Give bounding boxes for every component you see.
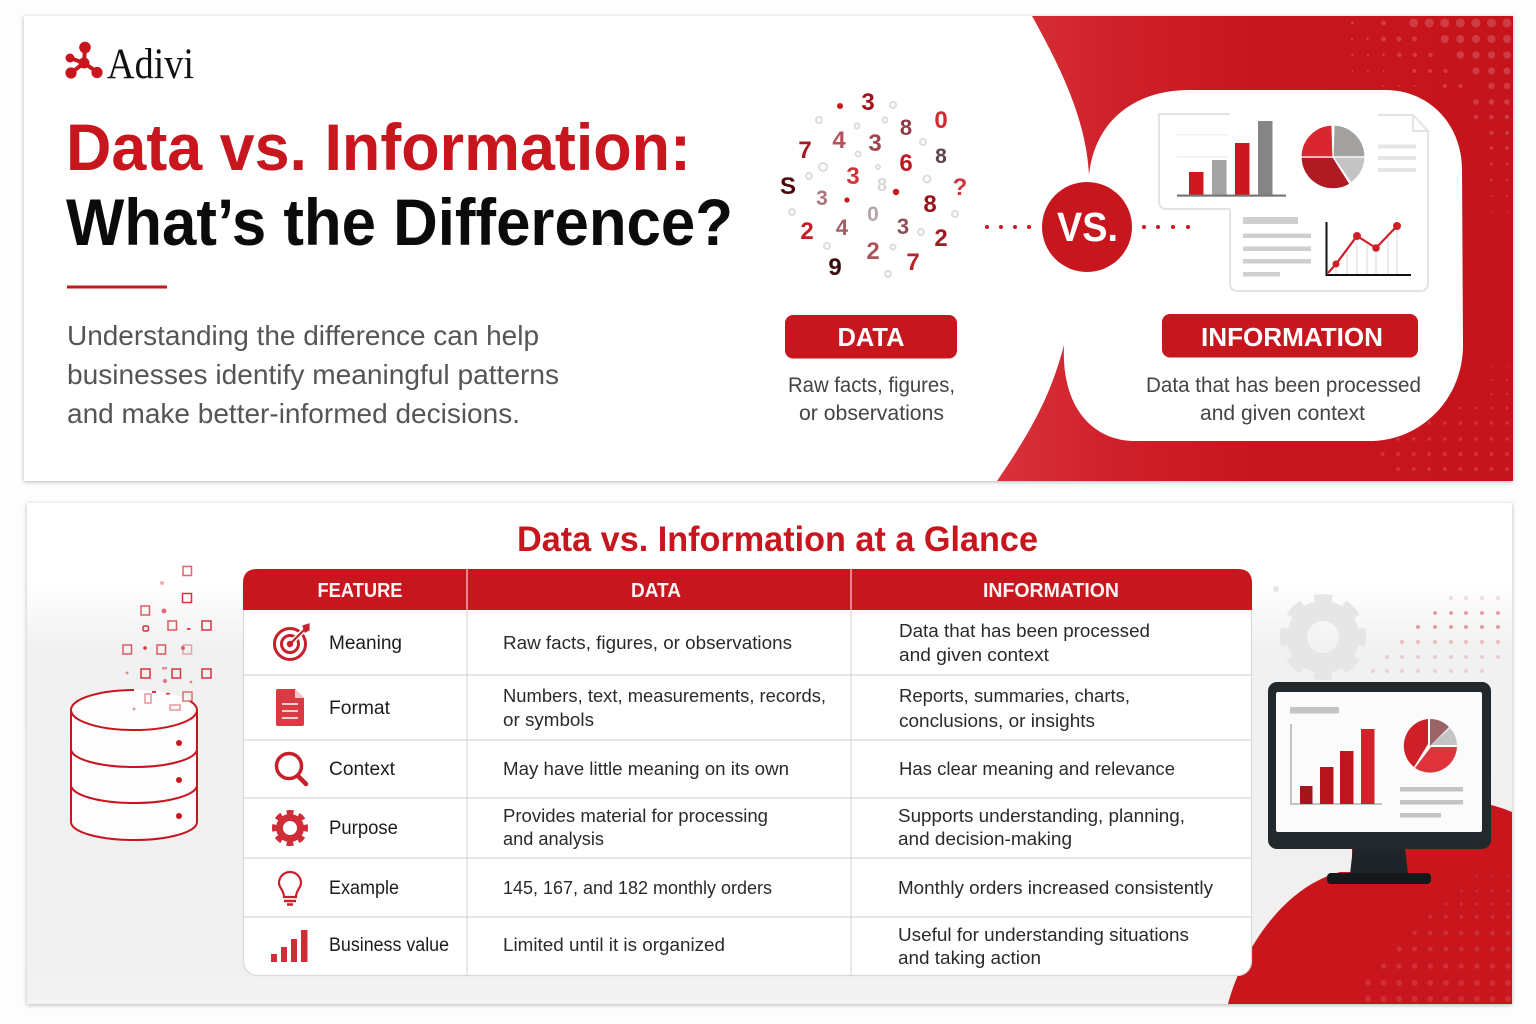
row: Purpose: and decision-making [898,828,1072,849]
logo: Adivi [65,41,194,88]
INFORMATION label button: INFORMATION [1201,322,1383,352]
row: Format: conclusions, or insights [899,710,1095,731]
decorative gear [1273,586,1357,671]
intro paragraph: businesses identify meaningful patterns [67,359,559,390]
illustration: database with data particles [71,566,211,840]
row: Format [276,685,1130,731]
illustration: scattered data numbers: 2 [866,238,880,265]
illustration: scattered data numbers: 0 [934,107,948,134]
illustration: scattered data numbers: 3 [816,187,828,210]
DATA label button: DATA [838,322,905,352]
red background shape [997,16,1513,481]
information description [1146,374,1421,425]
intro paragraph [67,320,559,429]
report card outline [1159,114,1428,291]
illustration: scattered data numbers: 7 [798,137,812,164]
VS badge: VS. [1057,204,1118,250]
data description: Raw facts, figures, [788,374,955,397]
row: Business value: Business value [329,935,449,956]
illustration: scattered data numbers: 4 [832,127,846,154]
row: Context: Has clear meaning and relevance [899,758,1175,779]
monitor screen [1276,692,1482,832]
row: Meaning: Data that has been processed [899,620,1150,641]
data particles [123,566,211,710]
illustration: scattered data numbers: 8 [900,115,912,140]
illustration: scattered data numbers: 9 [828,254,842,281]
INFORMATION label button [1162,314,1418,358]
illustration: scattered data numbers: 8 [935,145,947,168]
row: Meaning: and given context [899,644,1049,665]
bar chart [1177,121,1286,197]
table header row: INFORMATION [983,580,1119,602]
row: Context [276,754,1175,784]
row: Business value: Useful for understanding situations [898,924,1189,945]
report text lines [1243,217,1311,276]
row: Purpose [275,805,1185,849]
text lines beside pie [1378,144,1416,172]
title: What’s the Difference? [66,185,733,259]
icon: rising bars [271,930,308,962]
illustration: monitor dashboard [1268,682,1491,884]
row: Example [279,872,1214,904]
illustration: scattered data numbers: 7 [906,249,920,276]
row: Business value: and taking action [898,947,1041,968]
title: Data vs. Information: [66,110,691,184]
logo: Adivi: Adivi [107,41,194,88]
row: Example: 145, 167, and 182 monthly orders [503,877,772,898]
connector dots left [985,225,1031,229]
information description: Data that has been processed [1146,374,1421,397]
connector dots right [1142,225,1190,229]
data description [788,374,955,425]
screen pie chart [1404,719,1457,773]
row: Business value: Limited until it is organized [503,934,725,955]
DATA label button [785,315,957,358]
illustration: scattered data numbers: S [780,173,796,200]
information description: and given context [1200,402,1365,425]
illustration: scattered data numbers [780,89,967,281]
illustration: scattered data numbers: 3 [897,214,909,239]
row: Purpose: Supports understanding, planning, [898,805,1185,826]
monitor base [1327,873,1431,884]
row: Format: or symbols [503,709,594,730]
line chart [1326,222,1411,275]
halftone dots on red corner [1364,876,1508,999]
panel: hero [24,16,1513,481]
illustration: scattered data numbers: 8 [923,191,937,218]
intro paragraph: Understanding the difference can help [67,320,539,351]
intro paragraph: and make better-informed decisions. [67,398,520,429]
comparison table [243,569,1252,976]
illustration: scattered data numbers: 2 [934,225,948,252]
row: Example: Example [329,878,399,899]
row: Meaning [274,620,1150,665]
table header row: FEATURE [318,580,402,602]
illustration: scattered data numbers: 6 [899,150,913,177]
illustration: scattered data numbers: 3 [868,130,882,157]
row: Format: Reports, summaries, charts, [899,685,1130,706]
decorative dots [1371,596,1500,673]
row: Context: Context [329,759,396,780]
illustration: scattered data numbers: ? [953,174,967,201]
halftone dots bottom right [1381,367,1507,469]
monitor stand [1350,848,1408,874]
title underline [67,286,167,288]
icon: gear [275,813,305,843]
row: Context: May have little meaning on its own [503,758,789,779]
screen text lines [1400,787,1463,818]
icon: magnifier [276,754,306,784]
title [66,110,733,259]
screen bar chart [1291,724,1382,804]
icon: target [274,624,309,660]
table header row: DATA [631,580,681,602]
pie chart [1301,125,1365,189]
illustration: scattered data numbers: 0 [867,203,879,226]
row: Business value [271,924,1189,968]
monitor frame [1268,682,1491,849]
icon: document [276,689,304,726]
table header row [243,569,1252,610]
panel: comparison [27,503,1512,1004]
row: Format: Format [329,698,391,719]
row: Example: Monthly orders increased consistently [898,877,1214,898]
data description: or observations [799,402,944,425]
illustration: scattered data numbers: 3 [861,89,875,116]
icon: light bulb [279,872,301,904]
table body [244,570,1252,976]
row: Purpose: Purpose [329,818,398,839]
illustration: scattered data numbers: 4 [836,215,849,240]
heading: Data vs. Information at a Glance [517,520,1038,559]
screen title bar [1290,707,1339,714]
VS badge [1042,182,1132,272]
row: Meaning: Meaning [329,633,402,654]
illustration: information report [1159,114,1428,291]
illustration: scattered data numbers: 8 [877,175,887,195]
row: Meaning: Raw facts, figures, or observations [503,632,792,653]
row: Purpose: Provides material for processing [503,805,768,826]
row: Format: Numbers, text, measurements, records, [503,685,826,706]
illustration: scattered data numbers: 2 [800,218,814,245]
halftone dots top right [1337,23,1507,212]
row: Purpose: and analysis [503,828,604,849]
database cylinder [71,690,197,840]
illustration: scattered data numbers: 3 [846,163,860,190]
red corner shape [1228,805,1512,1004]
